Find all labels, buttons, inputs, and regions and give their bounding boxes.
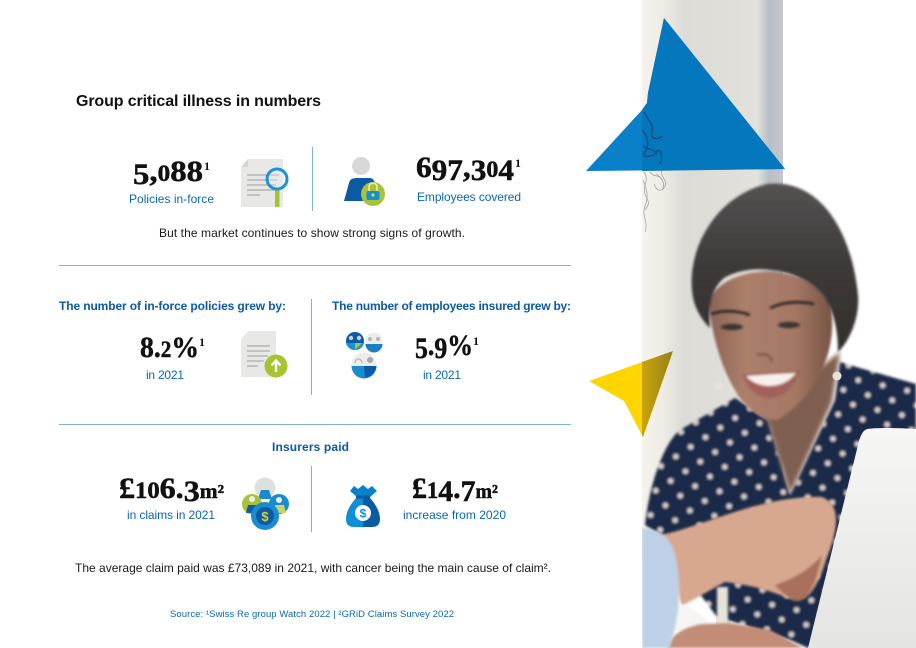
eyebrows and eyes bbox=[711, 302, 814, 330]
stat: employees covered: 1 bbox=[515, 156, 521, 170]
heading: insurers paid: Insurers paid bbox=[272, 440, 349, 454]
stat: employee growth: . bbox=[428, 329, 434, 362]
stat: increase from 2020: m² bbox=[476, 481, 498, 503]
stat: employees covered: 4 bbox=[498, 154, 514, 187]
stat: increase from 2020: . bbox=[453, 472, 461, 505]
photo backdrop bbox=[642, 0, 783, 630]
hair bbox=[692, 183, 858, 352]
stat: policies in-force: , bbox=[149, 155, 158, 188]
source note: Source: ¹Swiss Re group Watch 2022 | ²GRiD Claims Survey 2022 bbox=[170, 609, 454, 620]
icon: document with up arrow bbox=[241, 331, 288, 378]
stat: policies in-force: 5 bbox=[133, 158, 149, 191]
blue triangle bbox=[586, 18, 785, 171]
icon: money bag bbox=[346, 485, 380, 527]
icon: people around a dollar coin bbox=[242, 478, 289, 530]
face bbox=[708, 272, 832, 420]
divider bbox=[311, 466, 312, 532]
stat: policy growth: in 2021 bbox=[146, 368, 184, 382]
stat: policy growth: 8.2% bbox=[140, 331, 199, 364]
stat: employee growth: 1 bbox=[473, 334, 479, 348]
stat: claims paid: in claims in 2021 bbox=[127, 508, 215, 522]
shirt cuff and lower hand bbox=[667, 604, 803, 648]
stat: policies in-force: Policies in-force bbox=[129, 192, 214, 206]
heading: employees insured growth: The number of employees insured grew by: bbox=[332, 299, 571, 313]
stat: increase from 2020: 4 bbox=[438, 475, 453, 508]
stat: employees covered bbox=[416, 151, 521, 204]
photo: smiling woman at a laptop bbox=[642, 0, 916, 648]
yellow arrow bbox=[589, 351, 673, 437]
stat: employees covered: Employees covered bbox=[417, 190, 521, 204]
stat: policies in-force bbox=[129, 155, 214, 206]
stat: employee growth: 5 bbox=[415, 332, 428, 365]
icon: document with magnifying glass bbox=[241, 159, 287, 207]
nose, lips and smile bbox=[742, 354, 800, 398]
icon: three employee groups bbox=[346, 332, 382, 378]
light blue sleeve bbox=[642, 528, 679, 648]
stat: employee growth: in 2021 bbox=[423, 368, 461, 382]
heading: in-force policies growth: The number of in-force policies grew by: bbox=[59, 299, 286, 313]
title: Group critical illness in numbers bbox=[76, 93, 321, 110]
icon: person with padlock bbox=[344, 157, 385, 206]
earrings bbox=[832, 372, 842, 380]
stat: claims paid: 3 bbox=[184, 475, 200, 508]
icon: money bag: $ bbox=[360, 506, 367, 520]
stat: policies in-force: 088 bbox=[158, 155, 200, 188]
stat: increase from 2020: £1 bbox=[412, 472, 438, 505]
text: average claim: The average claim paid was £73,089 in 2021, with cancer being the main cause of claim². bbox=[75, 561, 551, 575]
stat: employee growth bbox=[415, 329, 479, 382]
pointing arm and hand bbox=[660, 497, 836, 606]
stat: employee growth: 9 bbox=[434, 332, 447, 365]
divider bbox=[311, 299, 312, 395]
stat: increase from 2020: increase from 2020 bbox=[403, 508, 506, 522]
text: market growth: But the market continues to show strong signs of growth. bbox=[159, 226, 465, 240]
stat: policies in-force: 1 bbox=[204, 159, 210, 173]
stray curls of hair bbox=[643, 170, 666, 232]
stat: claims paid: £106. bbox=[119, 472, 182, 505]
neck and chest bbox=[738, 352, 840, 495]
stat: employee growth: % bbox=[447, 329, 473, 362]
stat: claims paid bbox=[119, 472, 224, 522]
stat: employees covered: 97 bbox=[432, 154, 463, 187]
stat: increase from 2020 bbox=[403, 472, 506, 522]
stat: employees covered: 0 bbox=[486, 157, 498, 182]
laptop lid bbox=[808, 428, 916, 648]
stat: employees covered: 6 bbox=[416, 151, 431, 184]
icon: people around a dollar coin: $ bbox=[261, 509, 269, 524]
divider bbox=[312, 147, 313, 211]
stat: claims paid: m² bbox=[200, 481, 224, 503]
stat: policy growth bbox=[140, 331, 205, 382]
stat: policy growth: 1 bbox=[199, 335, 205, 349]
stat: employees covered: 3 bbox=[471, 154, 486, 187]
stat: increase from 2020: 7 bbox=[461, 475, 476, 508]
stat: employees covered: , bbox=[463, 151, 471, 184]
shirt with polka dots bbox=[645, 362, 916, 648]
